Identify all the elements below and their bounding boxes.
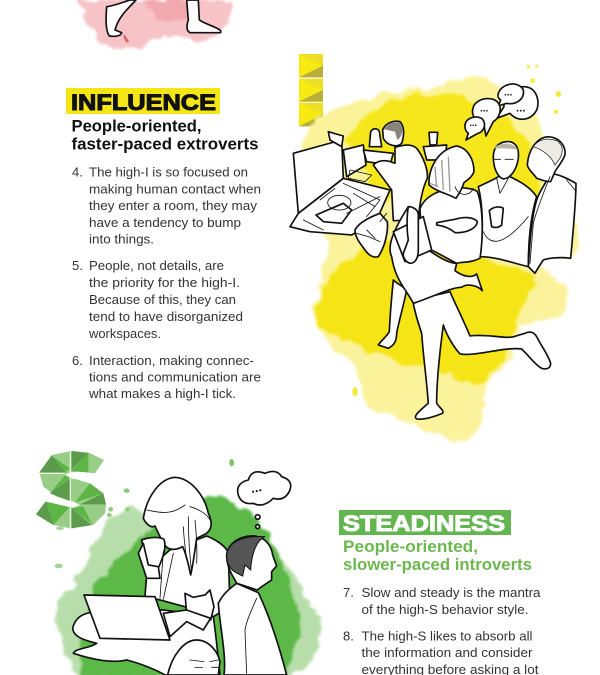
list item 6: what makes a high-I tick. — [88, 386, 236, 401]
man at desk — [369, 121, 427, 221]
list item 8: the information and consider — [362, 645, 533, 660]
man in profile — [218, 536, 287, 675]
panel: influence text — [66, 88, 261, 401]
speech bubbles: ... — [480, 103, 489, 114]
list item 4: The high-I is so focused on — [89, 164, 248, 180]
illustration: influence office scene — [290, 64, 577, 439]
speech bubbles: ... — [516, 102, 525, 114]
speech bubbles: ... — [504, 87, 513, 98]
speech bubbles — [465, 84, 538, 140]
subheading: influence: People-oriented, — [72, 116, 202, 136]
list item 4: 4. — [72, 164, 83, 180]
yellow watercolor wash — [303, 64, 577, 439]
list item 6: Interaction, making connec- — [89, 353, 254, 368]
thought cloud — [238, 471, 291, 529]
desk with monitor and papers — [290, 132, 447, 235]
thought cloud: ... — [249, 479, 263, 496]
list item 8: The high-S likes to absorb all — [362, 628, 533, 644]
list item 5: workspaces. — [88, 326, 161, 341]
illustration: steadiness scene — [55, 459, 320, 675]
list item 6: tions and communication are — [89, 370, 261, 384]
heading: steadiness: STEADINESS — [343, 511, 505, 536]
bottom girl face — [168, 640, 220, 675]
laptop — [84, 595, 170, 640]
speech bubbles: ... — [469, 118, 477, 128]
list item 5: tend to have disorganized — [89, 309, 243, 324]
list item 8: 8. — [343, 628, 354, 644]
list item 4: making human contact when — [89, 182, 261, 196]
list item 5: Because of this, they can — [89, 292, 236, 307]
list item 4: have a tendency to bump — [89, 215, 241, 230]
list item 5: the priority for the high-I. — [89, 275, 240, 290]
green watercolor wash — [55, 459, 320, 675]
heading: influence: INFLUENCE — [71, 90, 216, 115]
man with glasses and cup — [478, 142, 537, 267]
icon: green S logo — [36, 450, 106, 529]
subheading: influence: faster-paced extroverts — [72, 134, 258, 154]
woman with mug — [73, 477, 230, 675]
list item 4: into things. — [89, 232, 154, 246]
list item 7: Slow and steady is the mantra — [362, 585, 541, 600]
list item 7: of the high-S behavior style. — [362, 602, 528, 617]
hooded man — [527, 137, 576, 273]
panel: steadiness text — [339, 510, 541, 675]
running woman — [355, 207, 551, 419]
list item 7: 7. — [343, 585, 354, 600]
list item 5: People, not details, are — [89, 258, 224, 273]
subheading: steadiness: People-oriented, — [343, 537, 478, 556]
icon: yellow triangle I logo — [299, 54, 323, 126]
subheading: steadiness: slower-paced introverts — [343, 555, 532, 574]
list item 5: 5. — [72, 258, 83, 273]
illustration: dominance runner feet on pink wash — [77, 0, 229, 49]
list item 6: 6. — [72, 353, 83, 368]
cat — [163, 590, 214, 637]
list item 4: they enter a room, they may — [89, 198, 258, 213]
woman with bob haircut — [420, 146, 482, 263]
